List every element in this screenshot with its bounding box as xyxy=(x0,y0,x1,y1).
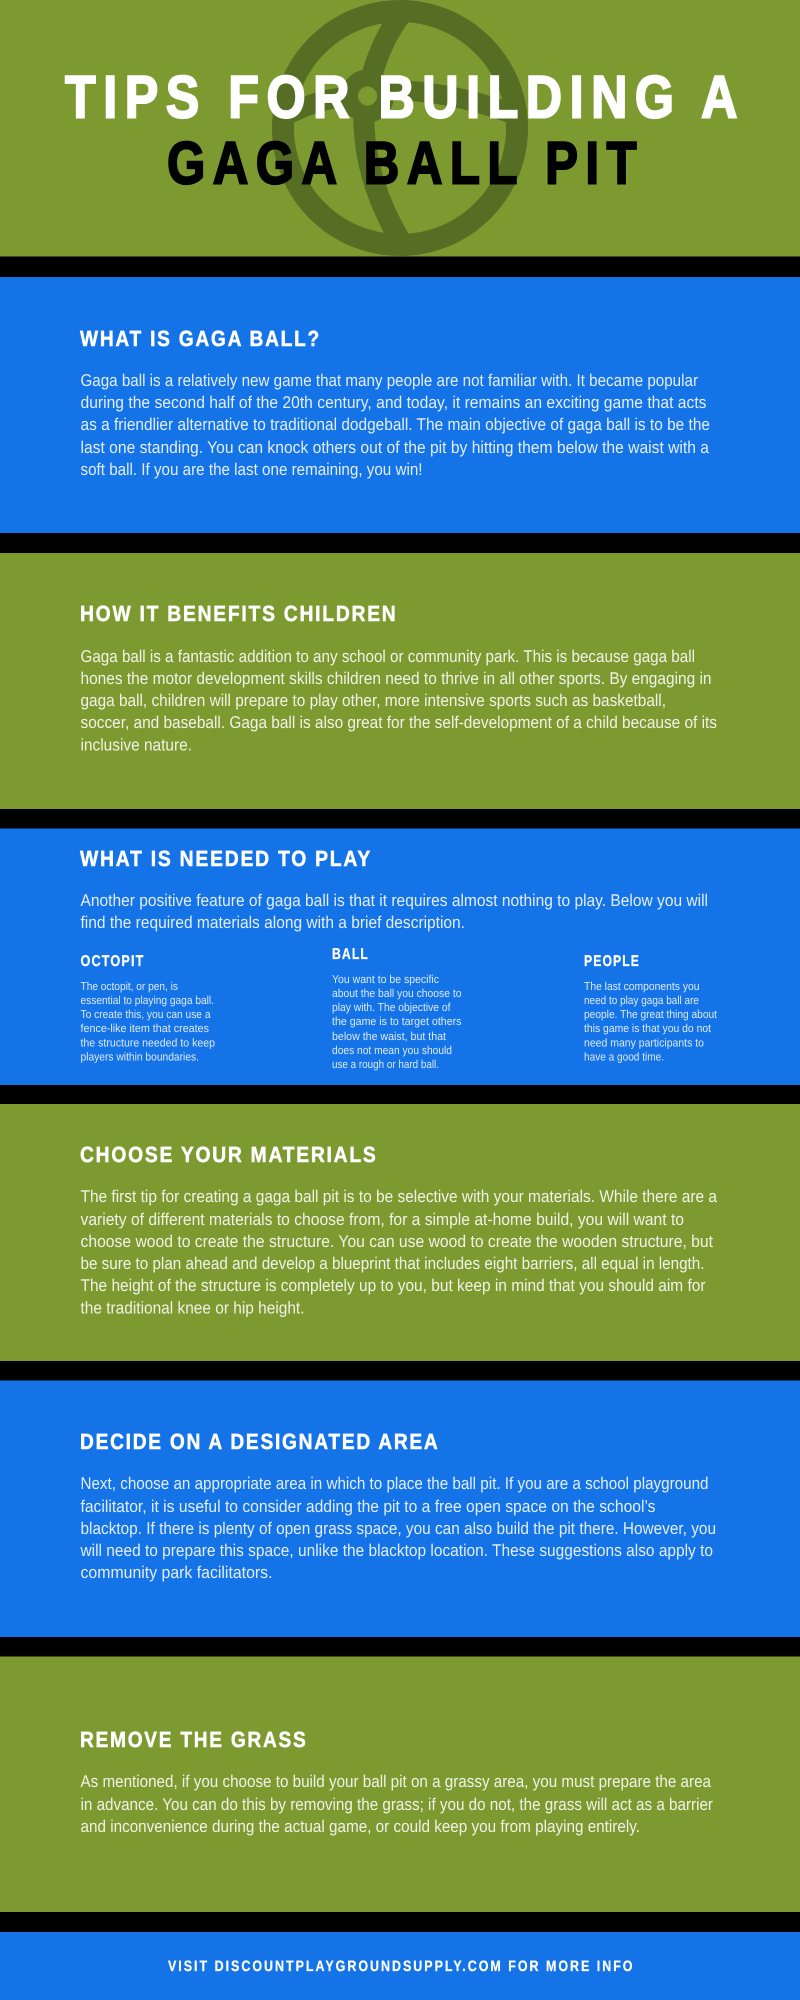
column: people: this game is that you do not xyxy=(584,1023,712,1035)
panel: decide on a designated area xyxy=(0,1380,800,1637)
heading: what is gaga ball: WHAT IS GAGA BALL? xyxy=(80,326,321,351)
text block: choose your materials: The first tip for creating a gaga ball pit is to be selective with your materials. While there are a xyxy=(80,1187,717,1206)
title xyxy=(65,64,745,196)
text block: decide on a designated area xyxy=(80,1474,716,1582)
text block: decide on a designated area: Next, choose an appropriate area in which to place the ball pit. If you are a school playground xyxy=(80,1474,708,1493)
text block: how it benefits children xyxy=(80,647,717,754)
column: ball: use a rough or hard ball. xyxy=(332,1059,439,1071)
text block: choose your materials: The height of the structure is completely up to you, but keep in mind that you should aim for xyxy=(80,1276,706,1295)
panel: what is needed to play xyxy=(0,828,800,1085)
column: people xyxy=(584,953,718,1064)
column: ball: You want to be specific xyxy=(332,974,439,986)
column: people: people. The great thing about xyxy=(584,1009,718,1021)
column: octopit: The octopit, or pen, is xyxy=(80,981,178,993)
text block: decide on a designated area: blacktop. If there is plenty of open grass space, you can also build the pit there. However, you xyxy=(80,1519,716,1538)
column: people: need many participants to xyxy=(584,1038,704,1050)
panel: how it benefits children xyxy=(0,553,800,809)
text block: what is gaga ball: last one standing. You can knock others out of the pit by hitting them below the waist with a xyxy=(80,438,709,457)
text block: decide on a designated area: facilitator, it is useful to consider adding the pit to a free open space on the school’s xyxy=(80,1497,656,1516)
panel: choose your materials xyxy=(0,1104,800,1361)
column: people: have a good time. xyxy=(584,1052,664,1064)
text block: choose your materials: variety of different materials to choose from, for a simple at-home build, you will want to xyxy=(80,1210,684,1229)
panel: footer xyxy=(0,1932,800,2000)
text block: remove the grass xyxy=(80,1772,713,1836)
column: people: need to play gaga ball are xyxy=(584,995,699,1007)
heading: remove the grass: REMOVE THE GRASS xyxy=(80,1727,308,1752)
text block: decide on a designated area: will need to prepare this space, unlike the blacktop location. These suggestions also apply to xyxy=(80,1541,713,1560)
text block: how it benefits children: gaga ball, children will prepare to play other, more intensive sports such as basketball, xyxy=(80,691,666,710)
text block: remove the grass: in advance. You can do this by removing the grass; if you do not, the grass will act as a barrier xyxy=(80,1795,713,1814)
column: people: PEOPLE xyxy=(584,953,640,970)
text block: remove the grass: As mentioned, if you choose to build your ball pit on a grassy area, you must prepare the area xyxy=(80,1772,711,1791)
panel: what is gaga ball xyxy=(0,277,800,533)
panel: header xyxy=(0,0,800,256)
column: octopit: OCTOPIT xyxy=(80,953,144,970)
column: ball: play with. The objective of xyxy=(332,1002,451,1014)
text block: what is gaga ball xyxy=(80,371,710,479)
text block: how it benefits children: hones the motor development skills children need to thrive in all other sports. By engaging in xyxy=(80,669,712,688)
text block: choose your materials: be sure to plan ahead and develop a blueprint that includes eight barriers, all equal in length. xyxy=(80,1254,704,1273)
column: octopit: essential to playing gaga ball. xyxy=(80,995,214,1007)
column: octopit xyxy=(80,953,215,1064)
panel: remove the grass xyxy=(0,1656,800,1912)
column: octopit: fence-like item that creates xyxy=(80,1023,209,1035)
icon: gaga ball watermark xyxy=(283,11,517,245)
footer call to action: VISIT DISCOUNTPLAYGROUNDSUPPLY.COM FOR MORE INFO xyxy=(168,1958,634,1975)
column: ball: does not mean you should xyxy=(332,1045,452,1057)
text block: needed to play intro xyxy=(80,891,708,932)
column: ball: below the waist, but that xyxy=(332,1031,447,1043)
heading: choose your materials: CHOOSE YOUR MATERIALS xyxy=(80,1142,378,1167)
text block: what is gaga ball: as a friendlier alternative to traditional dodgeball. The main objective of gaga ball is to be the xyxy=(80,415,710,434)
column: octopit: players within boundaries. xyxy=(80,1052,199,1064)
title: GAGA BALL PIT xyxy=(167,130,644,196)
text block: what is gaga ball: during the second half of the 20th century, and today, it remains an exciting game that acts xyxy=(80,393,706,412)
heading: how it benefits children: HOW IT BENEFITS CHILDREN xyxy=(80,601,398,626)
text block: how it benefits children: soccer, and baseball. Gaga ball is also great for the self-development of a child because of its xyxy=(80,713,717,732)
text block: choose your materials xyxy=(80,1187,717,1318)
text block: decide on a designated area: community park facilitators. xyxy=(80,1563,272,1582)
text block: how it benefits children: Gaga ball is a fantastic addition to any school or community park. This is because gaga ball xyxy=(80,647,695,666)
text block: what is gaga ball: soft ball. If you are the last one remaining, you win! xyxy=(80,460,422,479)
column: ball xyxy=(332,946,462,1071)
text block: choose your materials: the traditional knee or hip height. xyxy=(80,1298,304,1318)
text block: needed to play intro: Another positive feature of gaga ball is that it requires almost nothing to play. Below you will xyxy=(80,891,708,910)
text block: needed to play intro: find the required materials along with a brief description. xyxy=(80,913,465,932)
heading: what is needed to play: WHAT IS NEEDED TO PLAY xyxy=(80,846,372,871)
text block: choose your materials: choose wood to create the structure. You can use wood to create the wooden structure, but xyxy=(80,1232,713,1251)
column: ball: BALL xyxy=(332,946,369,963)
text block: remove the grass: and inconvenience during the actual game, or could keep you from playing entirely. xyxy=(80,1817,640,1836)
column: ball: the game is to target others xyxy=(332,1016,462,1028)
column: people: The last components you xyxy=(584,981,700,993)
text block: what is gaga ball: Gaga ball is a relatively new game that many people are not familiar with. It became popular xyxy=(80,371,698,390)
column: ball: about the ball you choose to xyxy=(332,988,462,1000)
column: octopit: To create this, you can use a xyxy=(80,1009,211,1021)
heading: decide on a designated area: DECIDE ON A DESIGNATED AREA xyxy=(80,1429,440,1454)
column: octopit: the structure needed to keep xyxy=(80,1038,215,1050)
text block: how it benefits children: inclusive nature. xyxy=(80,736,192,754)
